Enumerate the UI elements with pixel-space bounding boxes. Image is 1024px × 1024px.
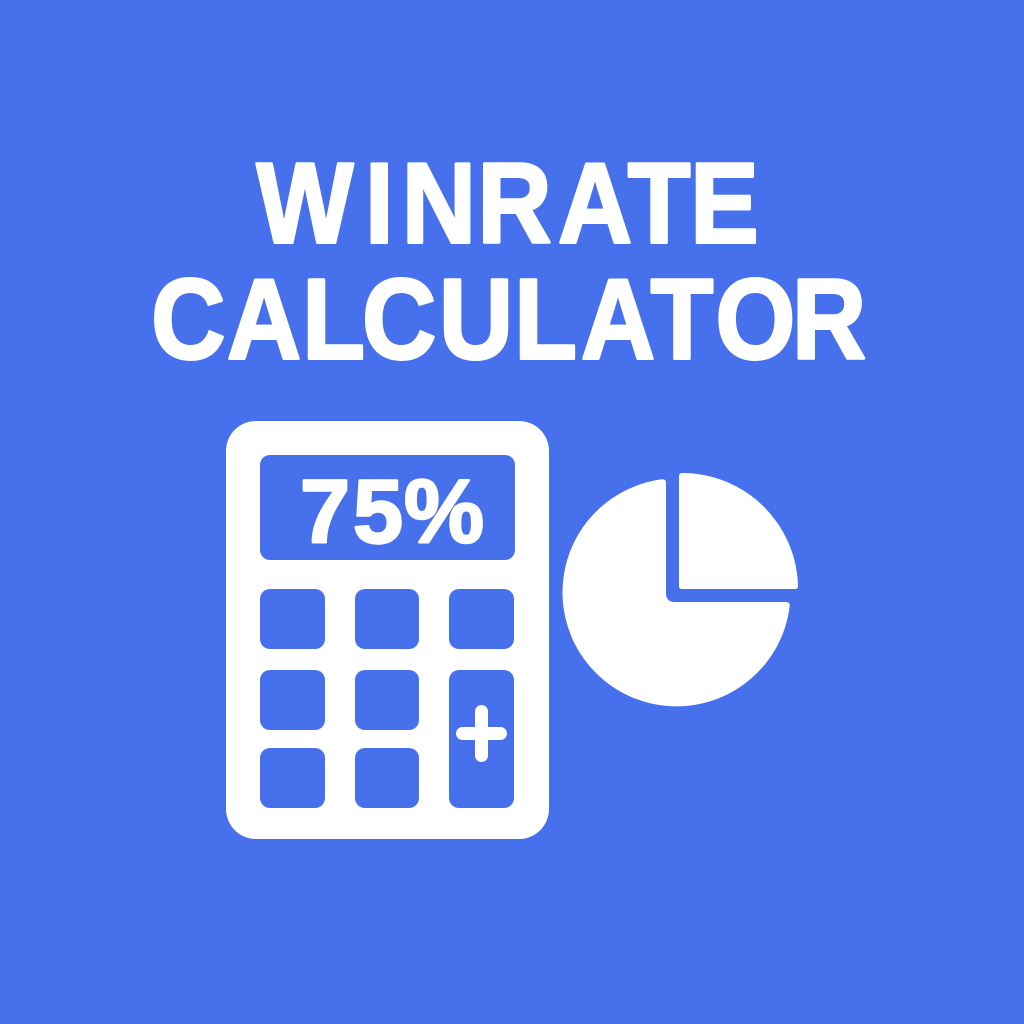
calculator display xyxy=(260,455,515,562)
title xyxy=(151,139,866,383)
calculator display: 75% xyxy=(300,462,484,562)
large pie segment xyxy=(563,479,790,706)
calculator body xyxy=(226,421,549,839)
title: CALCULATOR xyxy=(151,255,866,383)
calculator keys xyxy=(260,589,514,808)
plus sign xyxy=(456,705,507,762)
icon: calculator xyxy=(226,421,549,839)
title: WINRATE xyxy=(257,139,759,267)
icon: pie chart xyxy=(563,473,798,706)
quarter pie segment xyxy=(679,473,798,589)
